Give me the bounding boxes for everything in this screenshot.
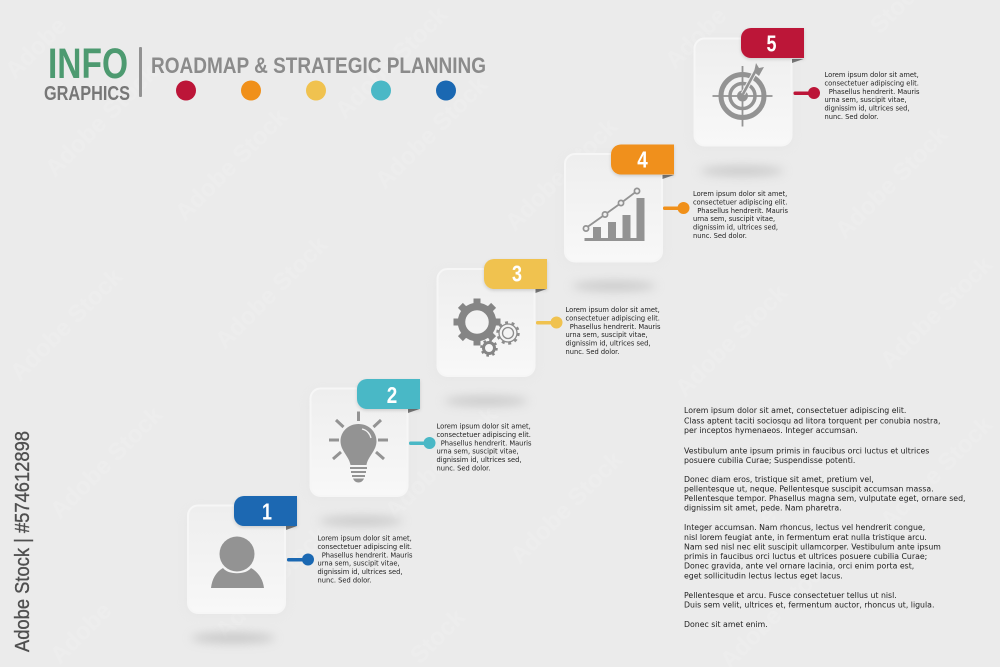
number tab 3 — [484, 259, 547, 289]
text block 3: urna sem, suscipit vitae, — [566, 331, 648, 339]
icon: target with arrow — [712, 63, 772, 126]
number tab 1: 1 — [262, 498, 272, 524]
text: Adobe Stock — [710, 451, 833, 574]
number tab 2 — [357, 379, 420, 409]
text: Adobe Stock — [500, 113, 623, 236]
text block 1: consectetuer adipiscing elit. — [318, 543, 412, 551]
text: Adobe Stock — [505, 446, 628, 569]
body text block: Nam sed nisl nec elit suscipit ullamcorper. Vestibulum ante ipsum — [684, 542, 941, 552]
icon: growth chart — [583, 188, 644, 241]
body text block: Vestibulum ante ipsum primis in faucibus orci luctus et ultrices — [684, 446, 929, 456]
text block 4: Phasellus hendrerit. Mauris — [693, 207, 789, 215]
text block 5: consectetuer adipiscing elit. — [824, 79, 919, 87]
text: Adobe Stock — [40, 59, 163, 182]
text block 5: Phasellus hendrerit. Mauris — [824, 88, 920, 96]
number tab 4: 4 — [637, 146, 648, 172]
text: Adobe Stock — [830, 121, 953, 244]
body text block: Pellentesque et arcu. Fusce consectetuer tellus ut nisl. — [684, 591, 897, 600]
text: Adobe — [660, 2, 732, 74]
connector 3 — [536, 316, 562, 328]
number tab 1 — [234, 496, 297, 526]
number tab 4 — [611, 144, 674, 174]
connector 2 — [409, 437, 436, 449]
text: Adobe Stock — [5, 263, 128, 386]
heading: INFO: INFO — [48, 40, 128, 88]
step 5 panel — [692, 28, 920, 149]
text: Adobe Stock — [210, 521, 333, 644]
text block 1: urna sem, suscipit vitae, — [318, 560, 400, 568]
text block 1: nunc. Sed dolor. — [318, 576, 371, 584]
text block 2: consectetuer adipiscing elit. — [436, 431, 531, 439]
text: Adobe Stock — [370, 71, 493, 194]
icon: gears — [454, 298, 518, 356]
text block 3: consectetuer adipiscing elit. — [566, 314, 660, 322]
text block 1: Phasellus hendrerit. Mauris — [318, 551, 413, 559]
body text block: Donec gravida, ante vel ornare lacinia, orci enim porta est, — [684, 562, 914, 570]
number tab 3: 3 — [512, 260, 522, 286]
body text block: Integer accumsan. Nam rhoncus, lectus vel hendrerit congue, — [684, 523, 925, 532]
step 3 panel — [435, 259, 661, 379]
body text block: dignissim sit amet, pede. Nam pharetra. — [684, 504, 842, 512]
text block 5: dignissim id, ultrices sed, — [824, 105, 909, 113]
connector 4 — [663, 202, 690, 214]
text block 1: dignissim id, ultrices sed, — [318, 568, 402, 576]
text block 3: Lorem ipsum dolor sit amet, — [566, 306, 660, 314]
heading: roadmap and strategic planning: ROADMAP & STRATEGIC PLANNING — [151, 53, 486, 78]
body text block: primis in faucibus orci luctus et ultrices posuere cubilia Curae; — [684, 552, 927, 561]
text block 4: nunc. Sed dolor. — [693, 232, 747, 240]
body text block: eget sollicitudin lectus lectus eget lacus. — [684, 572, 843, 580]
text block 2: dignissim id, ultrices sed, — [436, 456, 521, 464]
body text block: pellentesque ut, neque. Pellentesque suscipit accumsan massa. — [684, 484, 934, 494]
text block 5: nunc. Sed dolor. — [824, 113, 878, 121]
text block 4: consectetuer adipiscing elit. — [693, 198, 787, 206]
number tab 2: 2 — [387, 382, 397, 408]
text: Adobe Stock — [330, 1, 453, 124]
text block 3: nunc. Sed dolor. — [566, 348, 619, 356]
body text block: Donec diam eros, tristique sit amet, pretium vel, — [684, 475, 874, 484]
text block 2: urna sem, suscipit vitae, — [436, 448, 519, 456]
text block 3: Phasellus hendrerit. Mauris — [566, 323, 661, 331]
icon: light bulb — [329, 412, 388, 482]
connector 1 — [287, 554, 314, 566]
stock credit: Adobe Stock | #574612898 — [12, 431, 34, 652]
body text block: nisl lorem feugiat ante, in fermentum erat nulla tristique arcu. — [684, 533, 927, 542]
heading: GRAPHICS: GRAPHICS — [44, 82, 130, 105]
number tab 5 — [741, 28, 804, 58]
text: Adobe Stock — [380, 401, 503, 524]
title block — [44, 40, 486, 105]
text: Adobe — [0, 12, 72, 84]
text block 2: Lorem ipsum dolor sit amet, — [436, 422, 531, 430]
step 2 panel — [308, 379, 532, 526]
text block 4: Lorem ipsum dolor sit amet, — [693, 190, 787, 198]
body text block: per inceptos hymenaeos. Integer accumsan. — [684, 426, 858, 435]
legend dots — [176, 80, 456, 100]
body text block: Lorem ipsum dolor sit amet, consectetuer adipiscing elit. — [684, 406, 906, 415]
body text block: Pellentesque tempor. Phasellus magna sem, vulputate eget, ornare sed, — [684, 494, 966, 503]
text block 1: Lorem ipsum dolor sit amet, — [318, 534, 412, 542]
text block 5: urna sem, suscipit vitae, — [824, 96, 907, 104]
text block 2: Phasellus hendrerit. Mauris — [436, 439, 532, 447]
body text block: Class aptent taciti sociosqu ad litora torquent per conubia nostra, — [684, 416, 940, 426]
text: Adobe Stock — [210, 231, 333, 354]
body text block: posuere cubilia Curae; Suspendisse potenti. — [684, 456, 855, 465]
connector 5 — [794, 87, 820, 99]
text block 5: Lorem ipsum dolor sit amet, — [824, 71, 919, 79]
text: Adobe Stock — [170, 103, 293, 226]
step 1 panel — [186, 496, 413, 643]
body text block: Donec sit amet enim. — [684, 620, 768, 629]
step 4 panel — [563, 144, 789, 264]
small gear — [482, 340, 496, 356]
text: Adobe Stock — [875, 411, 998, 534]
large gear — [454, 298, 500, 346]
text block 4: dignissim id, ultrices sed, — [693, 224, 778, 232]
text block 4: urna sem, suscipit vitae, — [693, 215, 775, 223]
outline gear — [498, 322, 518, 344]
text block 3: dignissim id, ultrices sed, — [566, 340, 650, 348]
icon: person — [211, 536, 264, 588]
text: Adobe Stock — [45, 401, 168, 524]
number tab 5: 5 — [766, 30, 777, 56]
text: Adobe Stock — [875, 251, 998, 374]
body text block: Duis sem velit, ultrices et, fermentum auctor, rhoncus ut, ligula. — [684, 600, 934, 610]
text: Adobe Stock — [670, 279, 793, 402]
text block 2: nunc. Sed dolor. — [436, 464, 490, 472]
